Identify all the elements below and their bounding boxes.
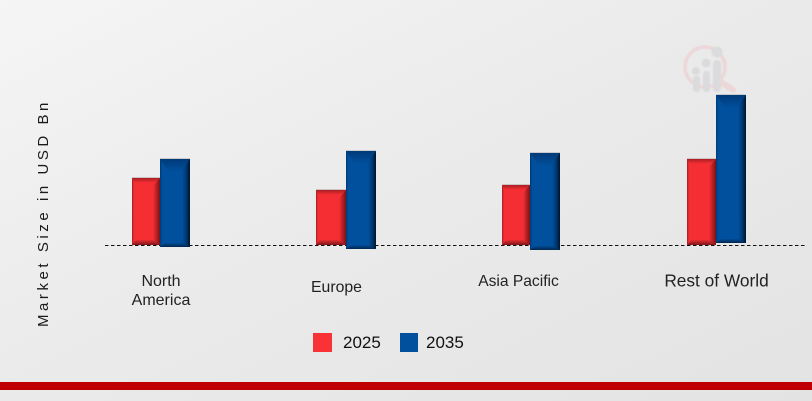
label: North America: North <box>141 273 181 290</box>
y axis title: Market Size in USD Bn <box>35 99 52 327</box>
legend swatch 2035 <box>400 333 418 352</box>
label: Europe: Europe <box>311 279 362 296</box>
label: North America <box>132 273 190 309</box>
bar: North America 2035 <box>160 158 190 247</box>
bar: Asia Pacific 2035 <box>530 152 560 250</box>
footer bar <box>0 382 812 390</box>
legend swatch 2025 <box>313 333 332 352</box>
label: Rest of World: Rest of World <box>664 270 769 290</box>
legend label 2035: 2035 <box>426 333 464 352</box>
baseline <box>105 244 806 246</box>
icon: watermark logo <box>685 46 733 92</box>
bar: Asia Pacific 2025 <box>502 184 530 245</box>
bar: Rest of World 2035 <box>716 94 746 243</box>
label: North America: America <box>132 292 190 309</box>
bar: North America 2025 <box>132 177 160 245</box>
bar: Europe 2035 <box>346 150 376 249</box>
label: Asia Pacific: Asia Pacific <box>478 273 559 290</box>
bar: Europe 2025 <box>316 189 346 245</box>
legend label 2025: 2025 <box>343 333 381 352</box>
legend <box>313 333 464 352</box>
bar: Rest of World 2025 <box>687 158 716 245</box>
